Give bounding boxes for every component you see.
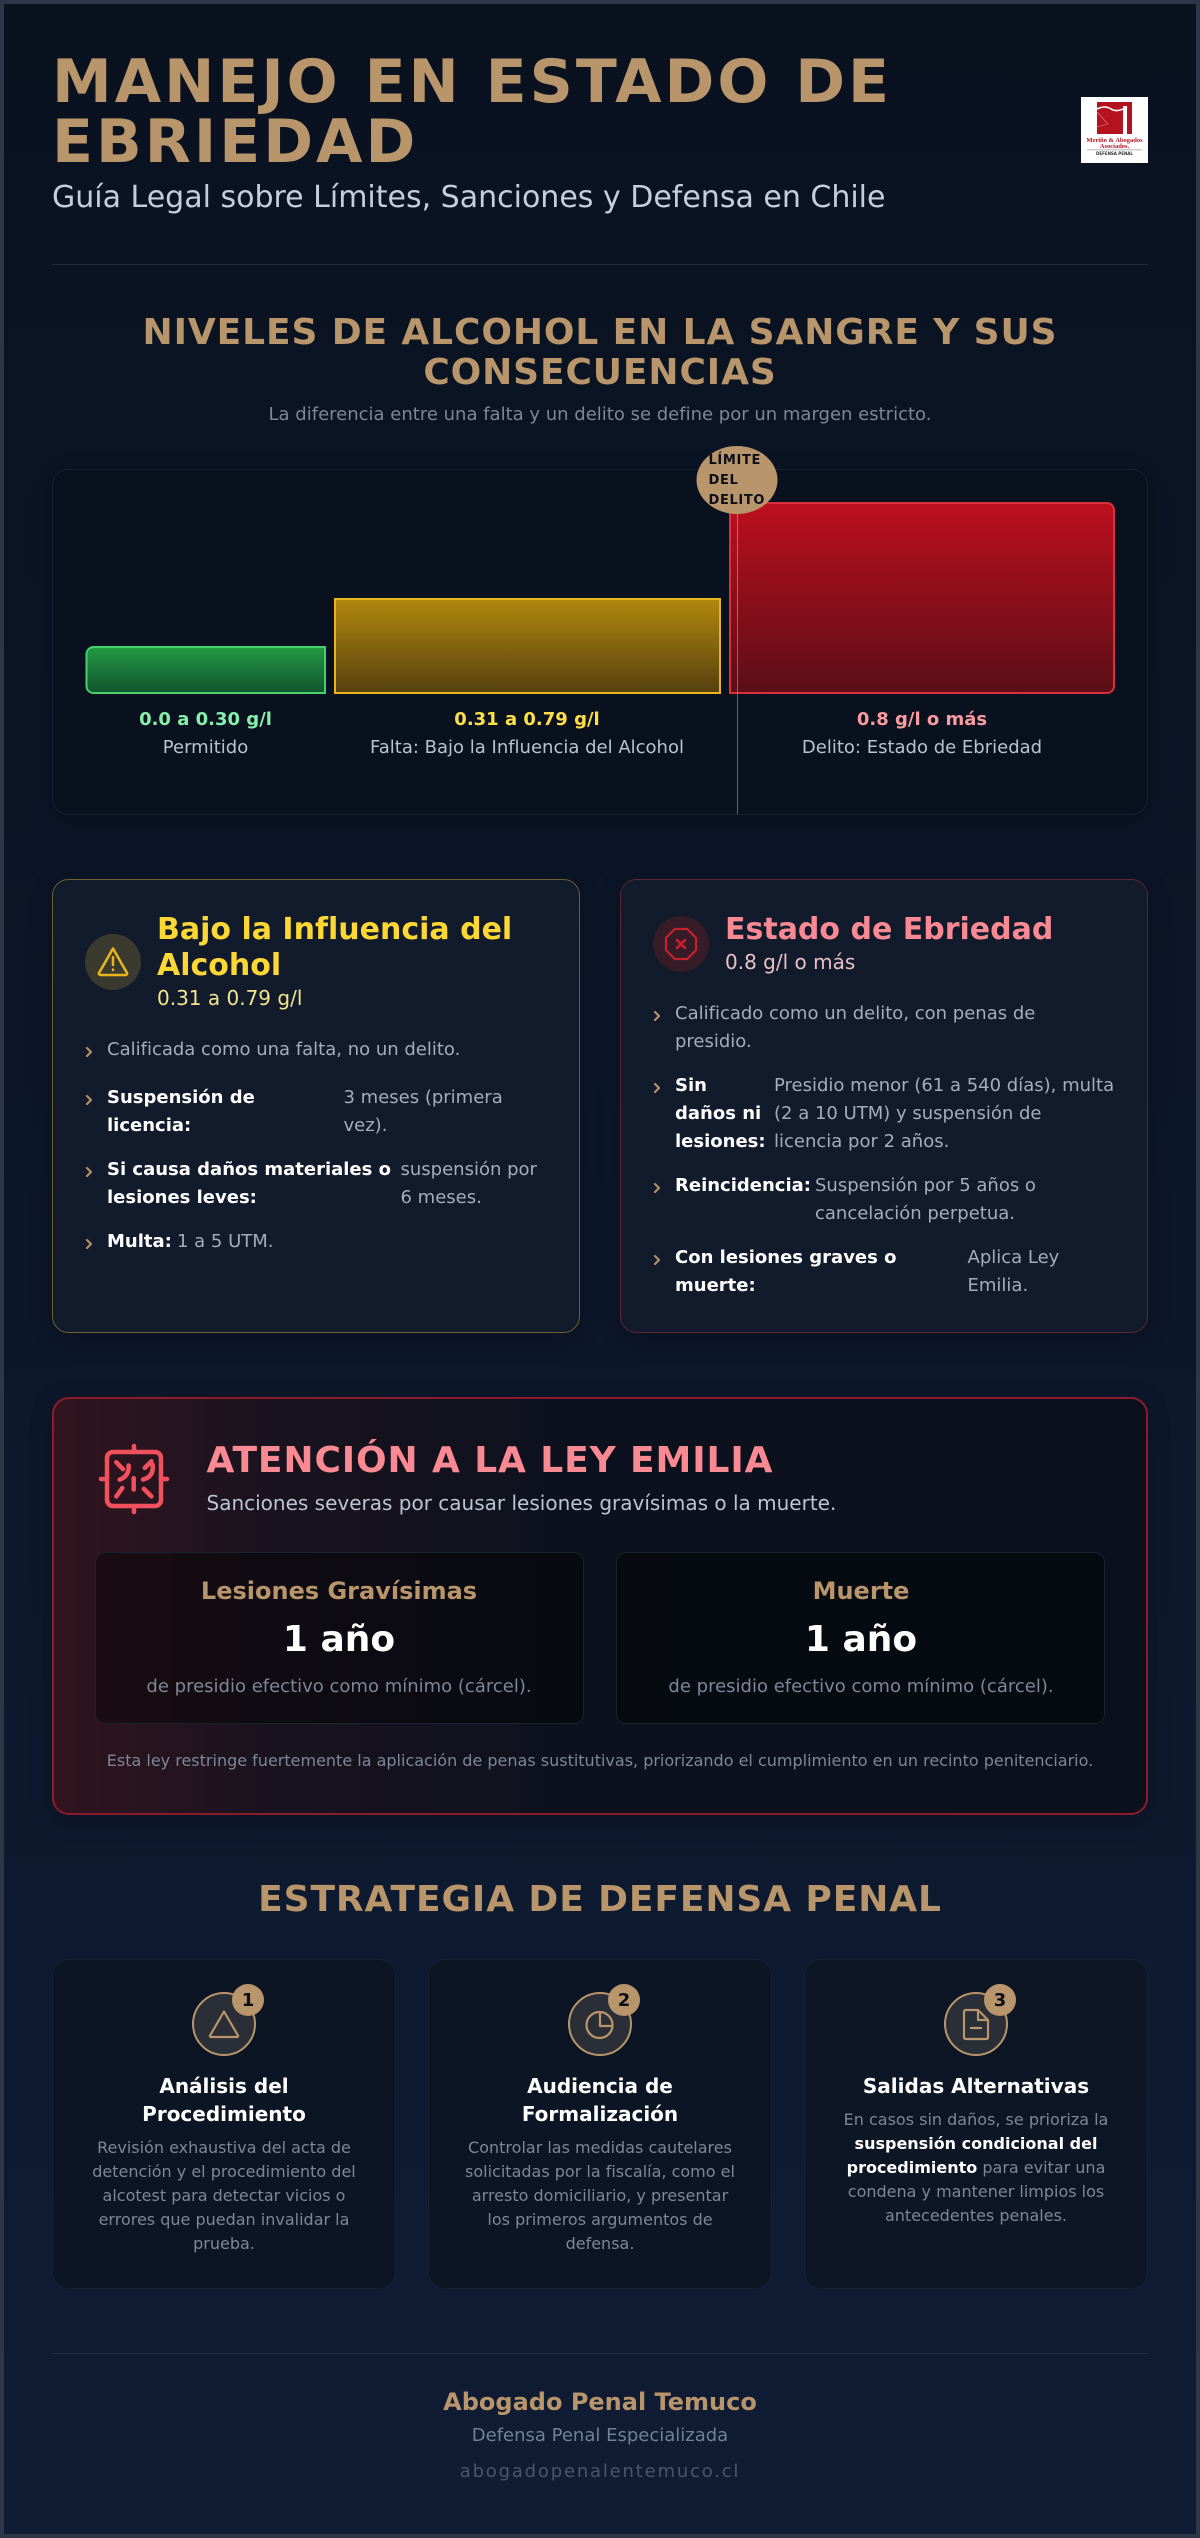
- heading: Alcohol: [157, 948, 281, 983]
- icon: document: 3: [994, 1990, 1006, 2011]
- list: [655, 1003, 1114, 1296]
- labels: permitido: 0.0 a 0.30 g/l: [139, 709, 272, 730]
- labels: permitido: Permitido: [163, 737, 248, 758]
- card text: Controlar las medidas cautelares: [468, 2138, 732, 2157]
- badge: limite del delito: [696, 446, 778, 514]
- labels: delito: Delito: Estado de Ebriedad: [802, 737, 1042, 758]
- list: Suspensión por 5 años o: [815, 1175, 1036, 1196]
- footer: Abogado Penal Temuco: [443, 2388, 757, 2416]
- list: Multa:: [107, 1231, 172, 1252]
- list: daños ni: [675, 1103, 761, 1124]
- list: Con lesiones graves o: [675, 1247, 896, 1268]
- card: lesiones gravisimas: de presidio efectivo como mínimo (cárcel).: [146, 1676, 532, 1697]
- labels: falta: 0.31 a 0.79 g/l: [454, 709, 600, 730]
- logo: DEFENSA PENAL: [1096, 151, 1133, 156]
- card text: detención y el procedimiento del: [92, 2162, 356, 2181]
- heading: Estado de Ebriedad: [725, 912, 1053, 947]
- card title: Procedimiento: [142, 2102, 306, 2126]
- list: muerte:: [675, 1275, 756, 1296]
- card: lesiones gravisimas: Lesiones Gravísimas: [201, 1577, 477, 1605]
- bar: falta: [335, 599, 720, 693]
- footer: Defensa Penal Especializada: [472, 2425, 728, 2446]
- section heading: niveles: CONSECUENCIAS: [423, 352, 777, 393]
- icon: triangle: [193, 1984, 264, 2055]
- title: MANEJO EN ESTADO DE: [52, 47, 892, 117]
- card: salidas alternativas: [804, 1960, 1148, 2288]
- card text: errores que puedan invalidar la: [99, 2210, 349, 2229]
- list: [87, 1039, 538, 1252]
- list: lesiones:: [675, 1131, 766, 1152]
- heading: Bajo la Influencia del: [157, 912, 512, 947]
- card: lesiones gravisimas: [96, 1552, 584, 1724]
- labels: delito: [802, 709, 1042, 758]
- card: muerte: Muerte: [813, 1577, 909, 1605]
- subtitle: Guía Legal sobre Límites, Sanciones y Defensa en Chile: [52, 180, 885, 215]
- header: [52, 47, 1148, 215]
- card title: Formalización: [522, 2102, 678, 2126]
- list: 1 a 5 UTM.: [177, 1231, 274, 1252]
- list: Calificado como un delito, con penas de: [675, 1003, 1035, 1024]
- card: lesiones gravisimas: 1 año: [283, 1619, 395, 1660]
- card text: procedimiento para evitar una: [847, 2158, 1105, 2177]
- labels: falta: Falta: Bajo la Influencia del Alcohol: [370, 737, 684, 758]
- labels: permitido: [139, 709, 272, 758]
- subheading: Sanciones severas por causar lesiones gravísimas o la muerte.: [206, 1491, 836, 1515]
- list: Emilia.: [968, 1275, 1028, 1296]
- list: licencia por 2 años.: [774, 1131, 949, 1152]
- card text: condena y mantener limpios los: [848, 2182, 1104, 2201]
- list: 6 meses.: [400, 1187, 482, 1208]
- section heading: niveles: NIVELES DE ALCOHOL EN LA SANGRE Y SUS: [143, 312, 1057, 353]
- card text: defensa.: [566, 2234, 634, 2253]
- list: Aplica Ley: [968, 1247, 1060, 1268]
- list: licencia:: [107, 1115, 191, 1136]
- heading: ATENCIÓN A LA LEY EMILIA: [206, 1439, 773, 1481]
- logo: Meriño & Abogados: [1086, 137, 1143, 144]
- note: Esta ley restringe fuertemente la aplicación de penas sustitutivas, priorizando el cumplimiento en un recinto penitenciario.: [107, 1751, 1093, 1770]
- icon: ley emilia alert: [101, 1446, 167, 1512]
- panel: estado de ebriedad: [620, 880, 1148, 1332]
- section heading: estrategia: ESTRATEGIA DE DEFENSA PENAL: [258, 1879, 942, 1920]
- card text: los primeros argumentos de: [487, 2210, 713, 2229]
- icon: triangle: 1: [242, 1990, 254, 2011]
- card text: antecedentes penales.: [885, 2206, 1067, 2225]
- card title: Audiencia de: [527, 2074, 673, 2098]
- footer: abogadopenalentemuco.cl: [460, 2461, 740, 2482]
- card text: Revisión exhaustiva del acta de: [97, 2138, 351, 2157]
- range: 0.31 a 0.79 g/l: [157, 986, 302, 1010]
- title: EBRIEDAD: [52, 107, 418, 177]
- list: vez).: [344, 1115, 387, 1136]
- list: Si causa daños materiales o: [107, 1159, 391, 1180]
- labels: delito: 0.8 g/l o más: [857, 709, 987, 730]
- panel: bajo la influencia: [52, 880, 580, 1332]
- footer: [443, 2388, 757, 2482]
- card title: Análisis del: [159, 2074, 289, 2098]
- card text: suspensión condicional del: [855, 2134, 1097, 2153]
- badge: limite del delito: DEL: [708, 473, 738, 488]
- card title: Salidas Alternativas: [863, 2074, 1089, 2098]
- bar: delito: [730, 503, 1114, 693]
- icon: stop octagon: [653, 916, 709, 972]
- logo: [1081, 97, 1148, 163]
- card text: arresto domiciliario, y presentar: [472, 2186, 729, 2205]
- card text: solicitadas por la fiscalía, como el: [465, 2162, 735, 2181]
- section subtitle: La diferencia entre una falta y un delito se define por un margen estricto.: [269, 404, 931, 425]
- icon: pie chart: [569, 1984, 640, 2055]
- card text: prueba.: [193, 2234, 255, 2253]
- list: presidio.: [675, 1031, 752, 1052]
- card: audiencia: [428, 1960, 772, 2288]
- icon: pie chart: 2: [618, 1990, 630, 2011]
- icon: warning triangle: [85, 934, 141, 990]
- panel: ley emilia: [53, 1398, 1147, 1814]
- bar: permitido: [86, 647, 325, 693]
- list: (2 a 10 UTM) y suspensión de: [774, 1103, 1042, 1124]
- list: Suspensión de: [107, 1087, 255, 1108]
- logo: Asociados.: [1100, 143, 1130, 150]
- badge: limite del delito: DELITO: [708, 493, 765, 508]
- list: lesiones leves:: [107, 1187, 257, 1208]
- list: 3 meses (primera: [344, 1087, 503, 1108]
- list: Presidio menor (61 a 540 días), multa: [774, 1075, 1114, 1096]
- panel: alcohol level chart: [52, 446, 1148, 814]
- range: 0.8 g/l o más: [725, 950, 855, 974]
- labels: falta: [370, 709, 684, 758]
- icon: document: [945, 1984, 1016, 2055]
- card: analisis: [52, 1960, 396, 2288]
- list: Calificada como una falta, no un delito.: [107, 1039, 460, 1060]
- list: suspensión por: [400, 1159, 538, 1180]
- card: muerte: 1 año: [805, 1619, 917, 1660]
- section heading: niveles: [143, 312, 1057, 425]
- list: cancelación perpetua.: [815, 1203, 1015, 1224]
- card text: alcotest para detectar vicios o: [103, 2186, 345, 2205]
- list: Sin: [675, 1075, 707, 1096]
- card: muerte: [616, 1552, 1104, 1724]
- list: Reincidencia:: [675, 1175, 811, 1196]
- card text: En casos sin daños, se prioriza la: [844, 2110, 1108, 2129]
- badge: limite del delito: LÍMITE: [708, 452, 761, 468]
- card: muerte: de presidio efectivo como mínimo (cárcel).: [668, 1676, 1054, 1697]
